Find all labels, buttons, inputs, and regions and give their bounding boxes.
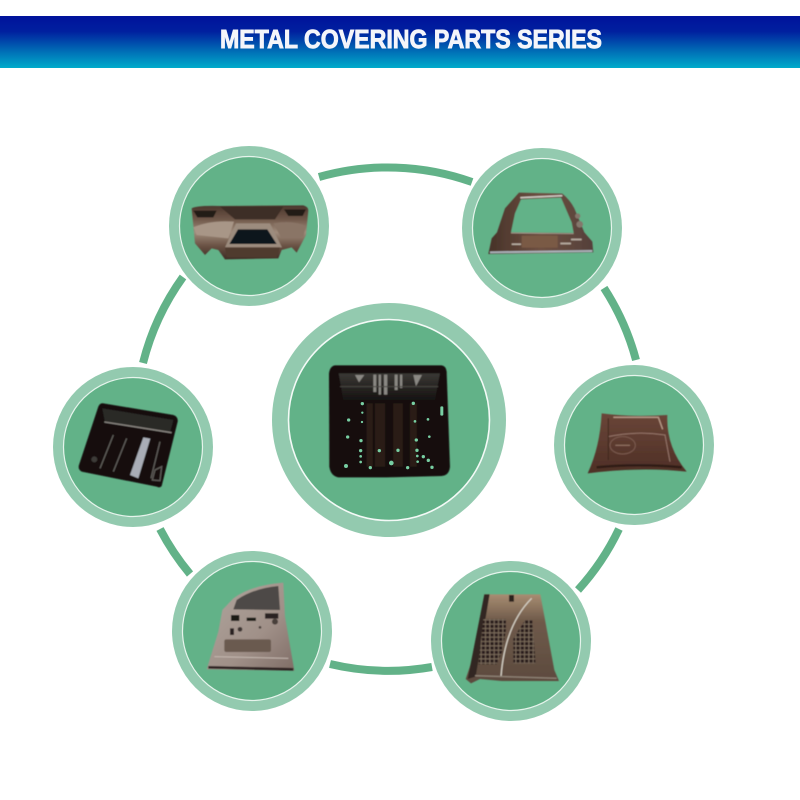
part: brown panel xyxy=(588,413,687,473)
part: large black tray xyxy=(329,365,450,477)
circle: bottom-right perforated part xyxy=(431,561,591,721)
circle: left black tray part xyxy=(53,367,213,527)
part: window frame xyxy=(488,193,593,254)
circle: bottom-left door part xyxy=(172,551,332,711)
header banner xyxy=(0,16,800,68)
circle: top-right frame part xyxy=(462,148,622,308)
connecting ring segments xyxy=(143,167,636,671)
title: METAL COVERING PARTS SERIES xyxy=(220,24,602,54)
part: door panel xyxy=(207,583,294,671)
part: perforated panel xyxy=(466,594,559,683)
part: bumper xyxy=(192,205,308,259)
centre circle: black tray xyxy=(272,303,506,537)
circle: top-left bumper part xyxy=(169,146,329,306)
part: small black tray xyxy=(79,403,178,487)
circle: right panel part xyxy=(554,365,714,525)
